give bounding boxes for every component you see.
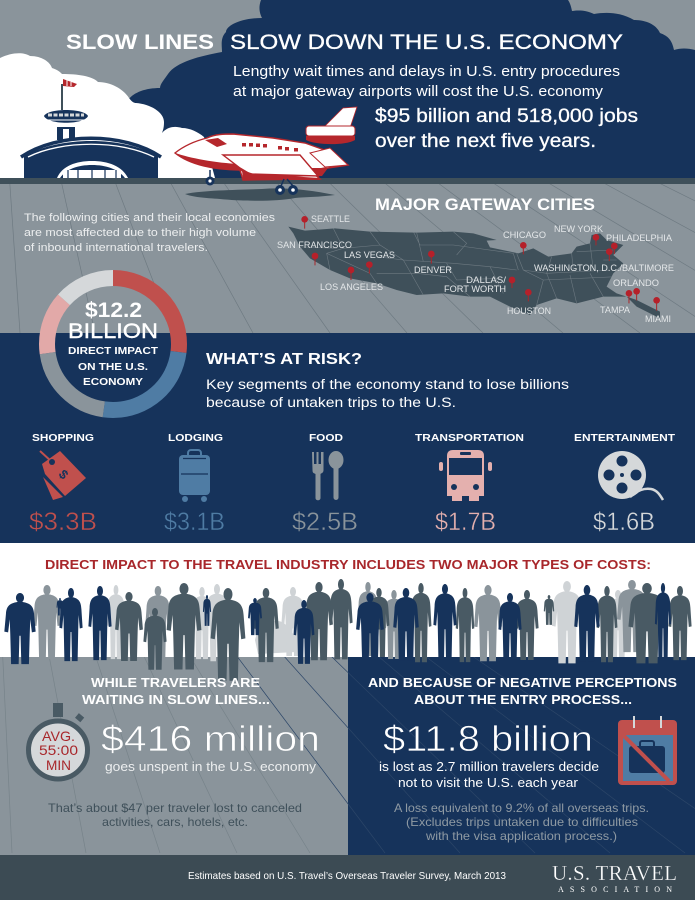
map heading: MAJOR GATEWAY CITIES	[375, 196, 595, 214]
city labels: LOS ANGELES	[320, 282, 383, 292]
right heading: AND BECAUSE OF NEGATIVE PERCEPTIONS	[368, 675, 677, 690]
city labels: DALLAS/	[466, 275, 507, 285]
donut centre text	[68, 299, 159, 388]
donut centre text: $12.2	[85, 299, 142, 322]
city labels: SEATTLE	[311, 214, 350, 224]
runway lines	[10, 184, 695, 333]
city labels: FORT WORTH	[444, 284, 506, 294]
stat caption left: goes unspent in the U.S. economy	[105, 760, 317, 774]
donut centre text: DIRECT IMPACT	[68, 345, 159, 357]
right note	[394, 801, 649, 843]
segment: food	[292, 432, 358, 536]
donut centre text: BILLION	[68, 320, 158, 343]
map pins	[301, 216, 660, 311]
map of the United States	[288, 216, 660, 318]
segment: lodging	[164, 432, 225, 536]
headline: slow lines: SLOW LINES	[66, 31, 214, 54]
segment: lodging: $3.1B	[164, 508, 225, 536]
city labels: HOUSTON	[507, 306, 551, 316]
city labels: WASHINGTON, D.C./BALTIMORE	[534, 263, 674, 273]
right note: A loss equivalent to 9.2% of all overseas trips.	[394, 801, 649, 815]
key figure text: $95 billion and 518,000 jobs	[375, 106, 638, 127]
segment: shopping	[29, 432, 97, 536]
logo: U.S. Travel Association: ASSOCIATION	[558, 885, 672, 894]
segment: transportation: TRANSPORTATION	[415, 432, 524, 444]
icon: film reel	[598, 451, 663, 500]
stat caption right	[379, 760, 599, 790]
city labels	[277, 214, 674, 324]
left heading: WHILE TRAVELERS ARE	[91, 675, 260, 690]
segment: entertainment	[574, 432, 676, 536]
navy storm cloud	[128, 0, 695, 180]
key figure text	[375, 106, 638, 152]
icon: suitcase	[179, 450, 210, 502]
segment: food: FOOD	[309, 432, 343, 444]
stat caption right: is lost as 2.7 million travelers decide	[379, 760, 599, 774]
left heading	[82, 675, 270, 707]
icon: stopwatch	[28, 703, 88, 779]
city labels: TAMPA	[600, 305, 630, 315]
ground	[0, 184, 695, 333]
intro text: at major gateway airports will cost the U.S. economy	[233, 84, 604, 100]
stat: 416 million: $416 million	[101, 718, 320, 759]
segment: transportation	[415, 432, 524, 536]
cities description	[24, 212, 276, 254]
runway strip	[0, 178, 695, 184]
donut centre text: ECONOMY	[83, 376, 143, 388]
icon: control tower and terminal	[21, 79, 161, 178]
headline: slow down the economy: SLOW DOWN THE U.S. ECONOMY	[230, 31, 623, 54]
segment: transportation: $1.7B	[435, 508, 496, 536]
icon: stopwatch: 55:00	[39, 742, 78, 758]
left heading: WAITING IN SLOW LINES...	[82, 692, 270, 707]
segment: entertainment: ENTERTAINMENT	[574, 432, 676, 444]
right heading	[368, 675, 677, 707]
sky background	[0, 0, 695, 180]
segment: food: $2.5B	[292, 508, 358, 536]
left note: That’s about $47 per traveler lost to canceled	[48, 801, 302, 815]
what's at risk text	[206, 377, 569, 410]
bottom panel: slow lines	[0, 657, 348, 855]
navy risk panel	[0, 333, 695, 543]
plane shadow	[185, 188, 335, 201]
icon: price tags: $	[56, 466, 72, 483]
segment: entertainment: $1.6B	[593, 508, 655, 536]
key figure text: over the next five years.	[375, 131, 596, 152]
source note: Estimates based on U.S. Travel’s Overseas Traveler Survey, March 2013	[188, 870, 506, 882]
what's at risk text: Key segments of the economy stand to lose billions	[206, 377, 569, 392]
intro text	[233, 64, 620, 100]
what's at risk heading: WHAT’S AT RISK?	[206, 351, 362, 368]
segment: shopping: SHOPPING	[32, 432, 94, 444]
city labels: PHILADELPHIA	[606, 233, 672, 243]
white band	[0, 543, 695, 657]
perspective lines	[2, 657, 695, 853]
donut chart: direct impact	[47, 278, 179, 410]
left note: activities, cars, hotels, etc.	[102, 815, 248, 829]
left note	[48, 801, 302, 829]
city labels: CHICAGO	[503, 230, 546, 240]
cities description: are most affected due to their high volume	[24, 227, 256, 239]
city labels: NEW YORK	[554, 224, 603, 234]
intro text: Lengthy wait times and delays in U.S. entry procedures	[233, 64, 620, 80]
city labels: LAS VEGAS	[344, 250, 395, 260]
city labels: SAN FRANCISCO	[277, 240, 352, 250]
band heading: DIRECT IMPACT TO THE TRAVEL INDUSTRY INCLUDES TWO MAJOR TYPES OF COSTS:	[45, 558, 651, 572]
what's at risk text: because of untaken trips to the U.S.	[206, 395, 456, 410]
cities description: The following cities and their local economies	[24, 212, 276, 224]
city labels: DENVER	[414, 265, 452, 275]
icon: fork and spoon	[312, 451, 344, 500]
footer band	[0, 855, 695, 900]
white cloud	[0, 53, 215, 178]
icon: stopwatch: AVG.	[42, 728, 75, 744]
city labels: ORLANDO	[613, 278, 659, 288]
right note: (Excludes trips untaken due to difficulties	[406, 815, 638, 829]
donut centre text: ON THE U.S.	[78, 361, 148, 373]
stat: 11.8 billion: $11.8 billion	[383, 718, 593, 759]
headline	[66, 31, 623, 54]
right heading: ABOUT THE ENTRY PROCESS...	[414, 692, 632, 707]
right note: with the visa application process.)	[425, 829, 617, 843]
logo: U.S. Travel Association: U.S. TRAVEL	[552, 861, 677, 885]
stat caption right: not to visit the U.S. each year	[398, 776, 578, 790]
bottom panel: negative perceptions	[348, 657, 695, 855]
icon: bus	[439, 450, 492, 501]
segment: shopping: $3.3B	[29, 508, 97, 536]
icon: stopwatch: MIN	[46, 757, 71, 773]
icon: crossed-out calendar	[618, 716, 677, 785]
segment: lodging: LODGING	[168, 432, 223, 444]
queue of traveler silhouettes	[4, 579, 692, 681]
cities description: of inbound international travelers.	[24, 242, 208, 254]
icon: red and white plane	[175, 107, 357, 195]
city labels: MIAMI	[645, 314, 671, 324]
